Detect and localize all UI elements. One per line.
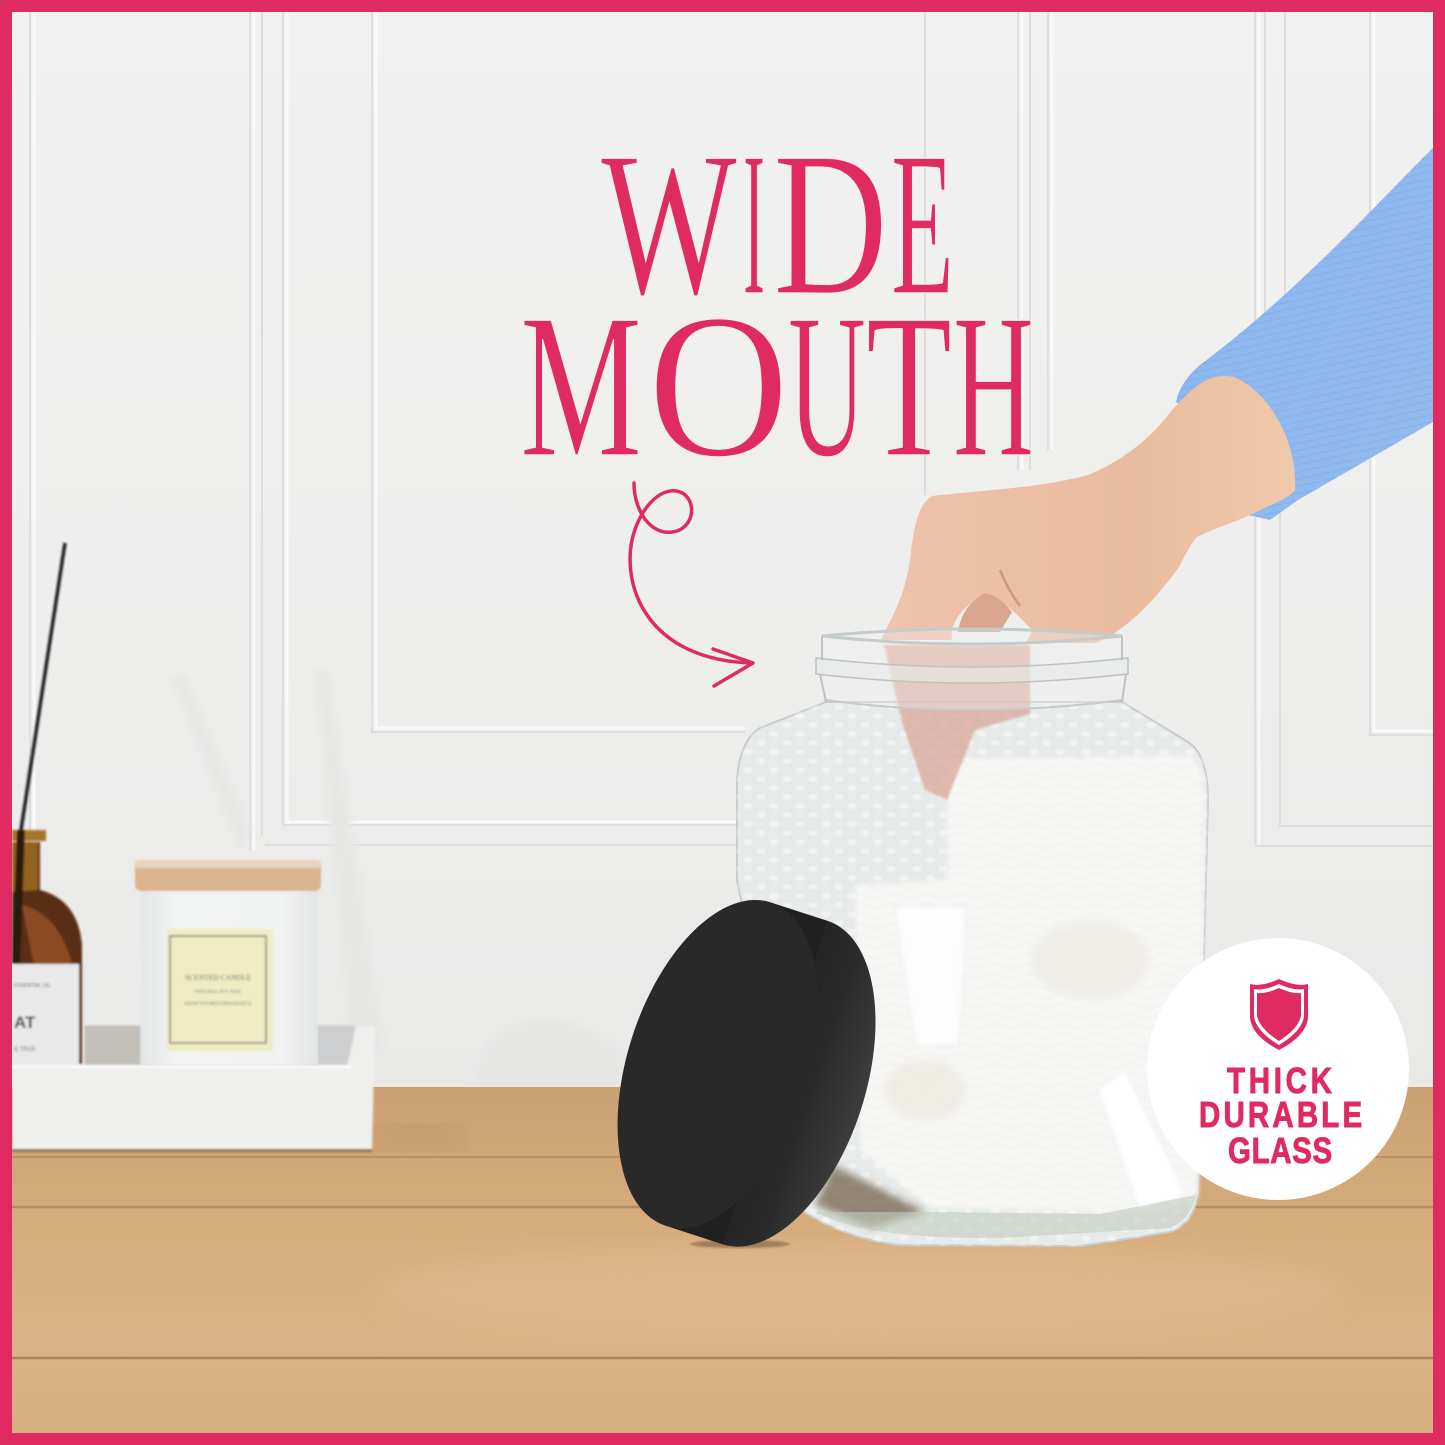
title: wide mouth	[520, 109, 1034, 500]
badge label	[1199, 1060, 1362, 1171]
black lid	[580, 875, 913, 1272]
title: wide mouth: D	[773, 109, 888, 338]
wall panel mouldings	[30, 12, 1433, 860]
jar neck	[822, 629, 1122, 710]
cotton contents	[855, 755, 1205, 1215]
icon: shield	[1250, 979, 1308, 1050]
scented candle	[135, 860, 321, 1065]
hand through glass	[884, 645, 1030, 800]
badge label: DURABLE	[1199, 1094, 1362, 1135]
scented candle: HAND POURED FRAGRANCE	[184, 1002, 252, 1007]
title: wide mouth: H	[953, 271, 1034, 500]
scented candle: SCENTED CANDLE	[185, 973, 251, 982]
title: wide mouth: U	[788, 271, 866, 500]
hammered glass texture	[737, 702, 1208, 1246]
title: wide mouth: O	[648, 271, 789, 500]
curly arrow	[630, 483, 753, 686]
white tray	[12, 1025, 375, 1152]
reed diffuser and amber bottle: ESSENTIAL OIL	[14, 983, 51, 989]
title: wide mouth: M	[520, 271, 642, 500]
sleeve	[1176, 148, 1433, 520]
glass jar	[737, 629, 1208, 1246]
wall background	[0, 0, 1445, 1090]
badge: thick durable glass	[1147, 938, 1409, 1200]
wall shadows	[172, 670, 640, 1085]
reed diffuser and amber bottle	[12, 543, 82, 1065]
reed diffuser and amber bottle: & TRUE	[14, 1047, 36, 1053]
badge label: GLASS	[1228, 1130, 1332, 1171]
wooden table	[0, 1087, 1445, 1445]
reed diffuser and amber bottle: AT	[14, 1013, 36, 1032]
title: wide mouth: W	[601, 109, 737, 338]
title: wide mouth: E	[891, 109, 954, 338]
title: wide mouth: T	[866, 271, 952, 500]
jar body	[737, 702, 1208, 1246]
badge label: THICK	[1227, 1060, 1332, 1101]
title: wide mouth: I	[743, 109, 765, 338]
hand	[881, 376, 1295, 643]
scented candle: NATURAL SOY WAX	[195, 990, 242, 995]
